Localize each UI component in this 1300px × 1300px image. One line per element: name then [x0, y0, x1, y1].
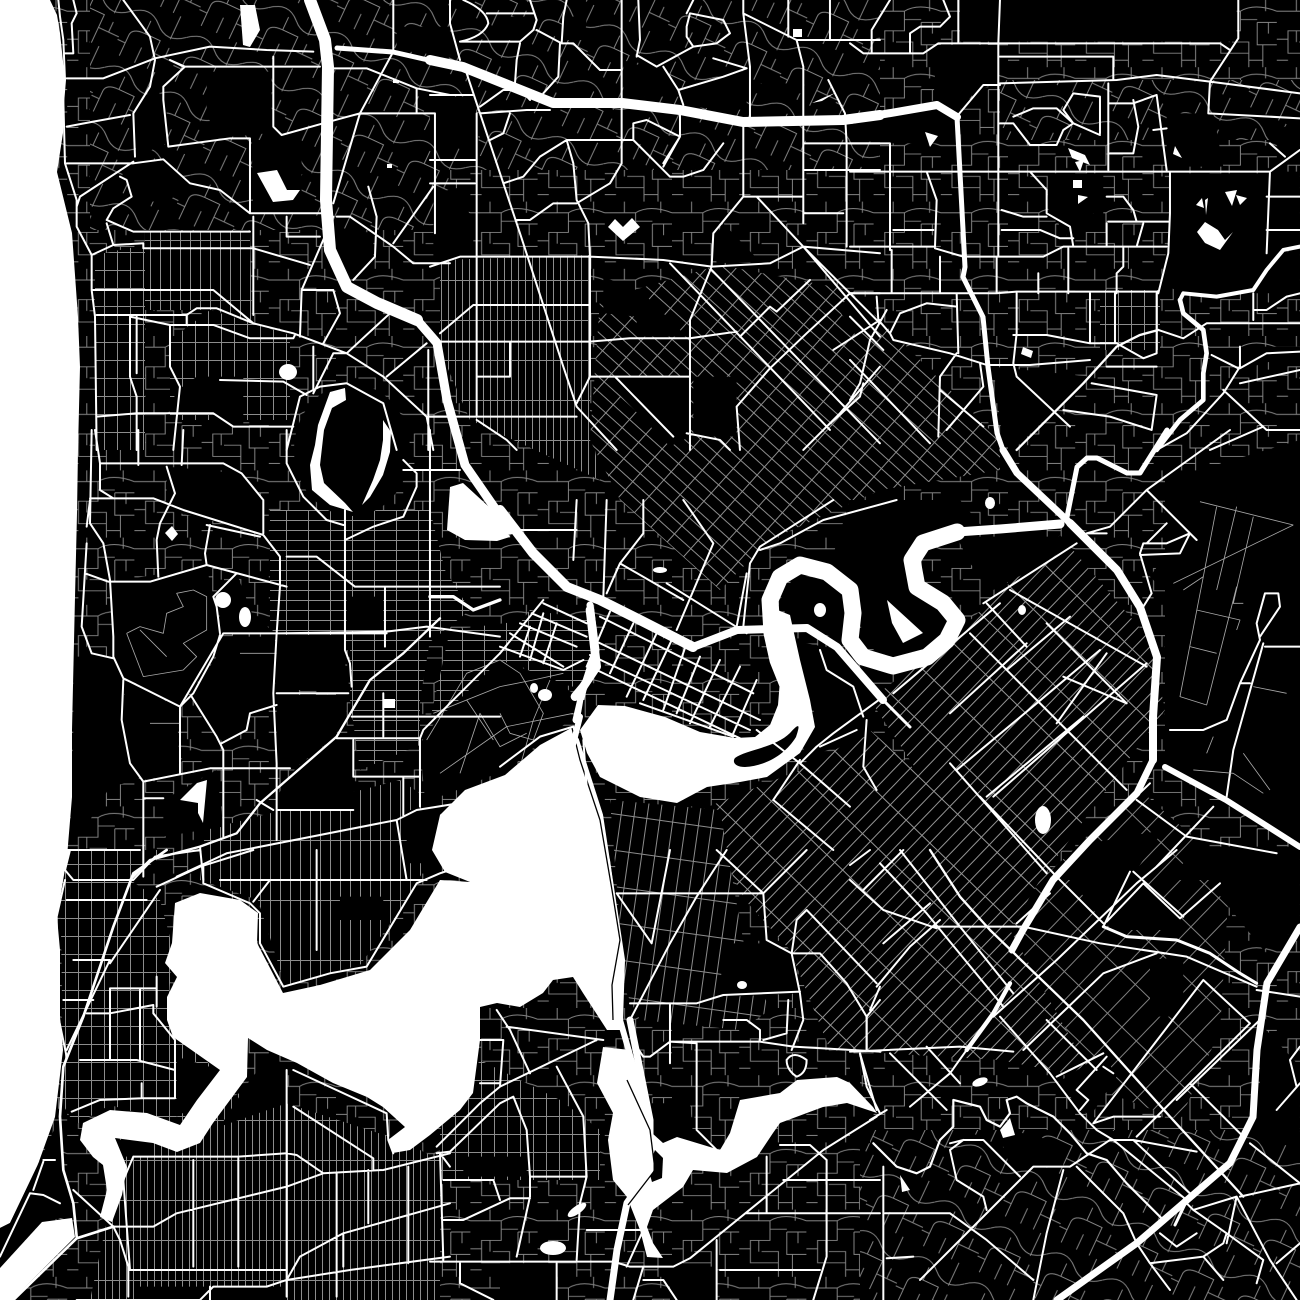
eastern grid and airport roads	[950, 430, 1300, 877]
ocean and coastline	[0, 0, 80, 1228]
Swan River: Melville Water and Freshwater Bay	[80, 726, 622, 1222]
arterial roads south-east	[850, 850, 1300, 1300]
arterial roads south-west	[0, 850, 450, 1300]
freeways and highways	[310, 0, 1300, 1300]
arterial roads west	[65, 430, 500, 880]
Perth Water	[580, 605, 815, 803]
airport runways and taxiways	[1173, 502, 1293, 793]
Bold Park walking tracks	[127, 590, 277, 723]
Fremantle harbour	[0, 1117, 75, 1300]
Swan River meander	[770, 524, 1060, 690]
arterial roads south-centre	[430, 850, 880, 1300]
arterial roads north-west	[58, 0, 450, 450]
street grid districts	[60, 232, 1230, 1300]
city centre streets	[500, 500, 1000, 850]
arterial roads north-east	[850, 0, 1300, 450]
heart-shaped pond	[608, 218, 640, 241]
Heirisson Island	[734, 726, 798, 767]
Herdsman Lake shoreline	[310, 388, 391, 512]
thin black shoreline separating freeway from water	[572, 700, 655, 1205]
Canning River	[597, 1047, 877, 1258]
Kings Park with sparse paths	[420, 660, 575, 800]
arterial roads north-centre	[430, 0, 880, 450]
island in Canning River	[648, 1150, 663, 1182]
